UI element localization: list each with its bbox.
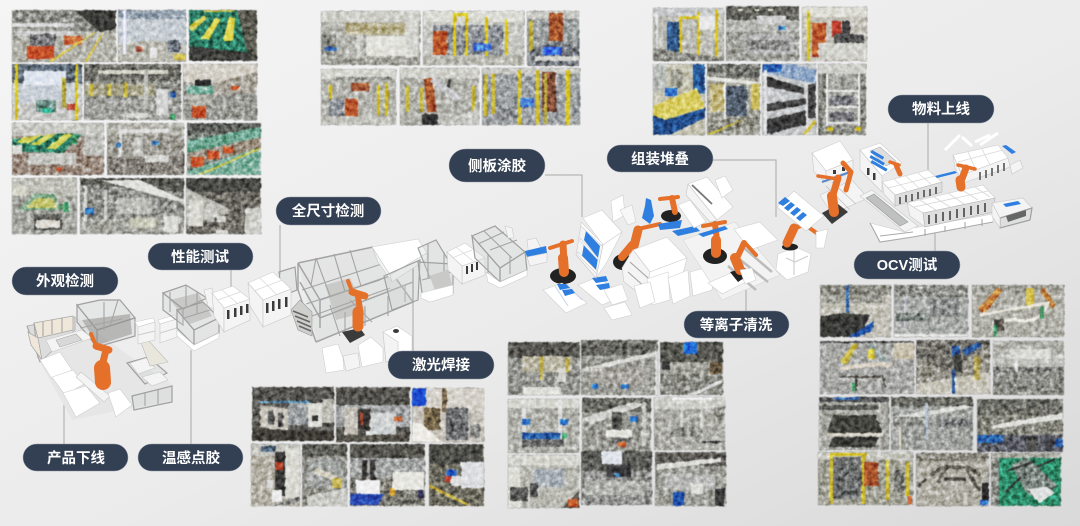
label: 组装堆叠: 组装堆叠 [631,150,689,168]
photo: bright workshop aisle [117,8,188,64]
photo: station with blue bins [507,398,580,454]
label: 侧板涂胶 [449,149,545,182]
photo: operator in blue [655,452,726,506]
label: 性能测试: 性能测试 [171,248,229,266]
photo collage: bottom-middle plasma cleaning stations [508,340,726,508]
photo collage: top-left AGV line [12,10,261,234]
photo: frame hanging from hoist [972,285,1064,337]
photo: rack between fences [706,62,762,136]
icon: orange large robot [818,163,851,212]
label: 外观检测 [12,267,118,295]
icon: orange robot transfer [787,224,818,243]
station: white rack with blue shelves [576,195,636,278]
photo: robot controller and fence [320,68,398,126]
station: upper conveyor unit [860,143,902,192]
station: product unloading cell [27,300,173,420]
photo collage: top-middle robot cells [321,11,580,125]
photo collage: bottom-right OCV test and frames [818,285,1064,506]
photo: yellow fenced rack [652,6,726,62]
photo: white cabinet machine [251,386,336,442]
production line equipment drawing [27,133,1032,420]
label: 产品下线: 产品下线 [47,449,105,467]
label: 物料上线: 物料上线 [912,100,970,118]
label: 物料上线 [888,95,994,123]
photo: cart of frames in hall [725,4,800,62]
station: temperature-sensing glue cell [163,285,219,351]
station: large white enclosure [604,237,715,308]
photo collage: bottom-left dispensing and laser stations [251,387,484,506]
photo: hall with robot frame [894,285,968,337]
photo: warehouse aisle [428,442,486,508]
photo: operators with blue bins [977,399,1063,452]
icon: orange robot plasma 1 [703,222,725,253]
photo: stacked frames on cart [819,397,889,450]
photo: test gantry and screens [106,122,186,176]
label: OCV测试 [854,251,960,279]
photo collage: top-right material racks [653,6,867,135]
station: side panel gluing robot and conveyor [525,241,632,320]
label: 外观检测: 外观检测 [36,272,94,290]
label: OCV测试: OCV测试 [877,257,938,274]
station: transfer robot and white box [776,224,828,280]
photo: hanging frame on shop floor [820,341,914,394]
label: 全尺寸检测 [276,197,381,225]
station: OCV test long machine rows [860,170,995,242]
station: laser welding frame [291,239,427,373]
photo: robot with blue light [526,10,580,68]
photo: AGV under gantry [581,396,652,452]
station: feed end unit with blue bins [945,133,1032,228]
photo: frame on green mat [991,453,1061,506]
label: 性能测试 [148,243,253,270]
photo: assembly hall with overhead frames [79,176,186,236]
photo: gluing line [301,442,348,508]
photo: hall overview [993,341,1064,395]
leader lines connecting labels to stations [64,123,935,444]
photo: AGV front view [11,176,78,236]
icon: orange welding robot [348,281,365,326]
label: 激光焊接: 激光焊接 [412,357,470,374]
label: 等离子清洗: 等离子清洗 [700,316,773,334]
photo: AGV with orange base [11,8,118,64]
photo: pump station with pail [250,442,302,508]
photo: row of orange AGVs [186,122,262,176]
label: 温感点胶 [138,444,243,471]
photo: cell behind yellow posts [481,66,582,126]
photo: green pallet on AGV [10,122,106,176]
photo: pails on blue pallet [349,442,426,508]
station: performance test cabinet [212,286,250,332]
photo: empty fixture table [653,396,726,452]
photo: yellow fixture plate [652,62,706,136]
station: glass cell after welding [418,226,546,302]
photo: hall with white AGV [507,340,581,396]
icon: small orange robot [890,162,900,174]
photo: yellow fence with robot [818,452,913,505]
photo: workshop with white AGV [83,62,182,122]
icon: orange robot on OCV line [958,165,975,187]
label: 组装堆叠 [607,145,713,172]
photo: yellow safety posts [11,62,84,122]
photo: bright hall floor [891,397,973,450]
photo: overhead white sign [580,450,654,506]
station: material feed blue trays [777,141,868,231]
photo: black rack with tubes [761,62,818,136]
icon: orange upper robot [660,197,678,212]
photo: AGV carrying green board [182,63,258,122]
photo: KUKA style robot [399,66,480,126]
icon: orange robot plasma 2 [735,243,756,270]
photo: gantry with blue post [820,285,891,337]
icon: orange robot with long arm [622,224,660,257]
icon: orange robot arm [91,334,109,382]
label: 激光焊接 [388,351,494,379]
label: 全尺寸检测: 全尺寸检测 [292,202,364,220]
photo: frame on floor [916,453,989,506]
icon: orange gluing robot [550,241,572,272]
photo: worker at bench [507,454,580,509]
station: assembly stacking robots [613,176,733,270]
photo: green pallet with yellow bars [188,8,258,62]
label: 产品下线 [23,444,128,471]
photo: storage cart [817,62,868,136]
photo: barrels with pumps [411,386,486,444]
station: white cabinets after unloading [135,315,177,344]
photo: hoist close-up [916,340,990,394]
photo: assembly station [320,10,422,66]
photo: fenced robot cell with yellow posts [422,10,526,66]
photo: blue sign hanging [659,340,724,396]
label: 侧板涂胶: 侧板涂胶 [468,157,526,175]
station: full-size inspection cabinet [248,267,297,327]
label: 温感点胶: 温感点胶 [162,449,220,467]
label: 等离子清洗 [684,311,789,338]
station: plasma cleaning area [683,222,780,300]
photo: long hall corridor [185,176,262,236]
photo: dispensing machine [335,386,412,444]
photo: workers and orange frame [801,6,868,62]
photo: overhead frames with screens [580,338,659,396]
